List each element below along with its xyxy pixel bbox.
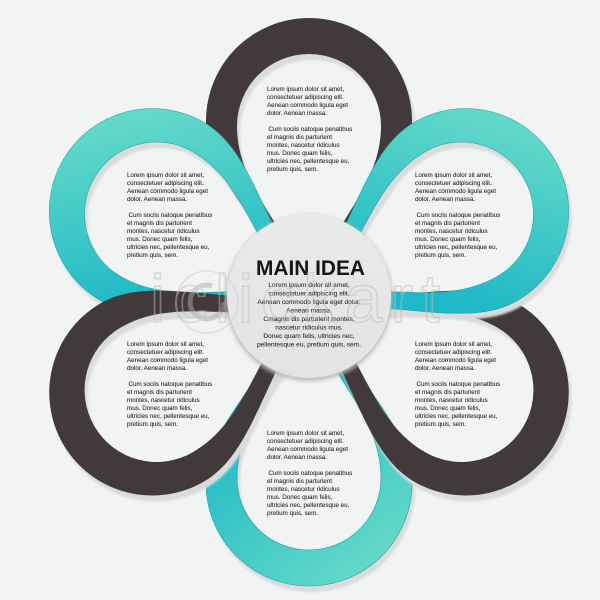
- text block: lower left petal: Cum sociis natoque penatibus: [128, 381, 212, 388]
- text block: bottom petal: consectetuer adipiscing elit.: [267, 438, 344, 445]
- text block: center description: [257, 282, 361, 348]
- text block: upper right petal: Aenean commodo ligula eget: [415, 188, 496, 195]
- text block: lower right petal: [415, 341, 500, 428]
- text block: upper left petal: pretium quis, sem.: [127, 252, 178, 259]
- text block: top petal: et magnis dis parturient: [267, 134, 332, 141]
- text block: lower left petal: dolor. Aenean massa.: [127, 365, 187, 372]
- text block: lower left petal: Lorem ipsum dolor sit amet,: [127, 341, 204, 348]
- watermark: iclickart: [150, 261, 440, 337]
- text block: upper right petal: et magnis dis parturient: [415, 220, 480, 227]
- text block: lower left petal: mus. Donec quam felis,: [127, 405, 193, 412]
- text block: upper left petal: [127, 172, 212, 259]
- text block: center description: Aenean commodo ligula eget dolor.: [257, 299, 361, 306]
- text block: top petal: [267, 86, 352, 173]
- petal: bottom teal ring: [206, 357, 415, 592]
- text block: lower left petal: consectetuer adipiscing elit.: [127, 349, 204, 356]
- text block: bottom petal: Cum sociis natoque penatibus: [268, 470, 352, 477]
- text block: lower right petal: et magnis dis parturient: [415, 389, 480, 396]
- text block: upper right petal: mus. Donec quam felis,: [415, 236, 481, 243]
- text block: upper right petal: dolor. Aenean massa.: [415, 196, 475, 203]
- petal: upper left teal ring: [12, 71, 316, 370]
- text block: lower right petal: consectetuer adipiscing elit.: [415, 349, 492, 356]
- text block: lower right petal: Aenean commodo ligula eget: [415, 357, 496, 364]
- text block: lower right petal: ultricies nec, pellentesque eu,: [415, 413, 498, 420]
- text block: upper left petal: montes, nascetur ridiculus: [127, 228, 200, 235]
- text block: bottom petal: pretium quis, sem.: [267, 510, 318, 517]
- text block: center description: pellentesque eu, pretium quis, sem.: [257, 342, 361, 348]
- text block: top petal: ultricies nec, pellentesque eu,: [267, 158, 350, 165]
- text block: top petal: dolor. Aenean massa.: [267, 110, 327, 117]
- petal: lower left dark ring: [12, 240, 316, 539]
- text block: bottom petal: dolor. Aenean massa.: [267, 454, 327, 461]
- text block: upper right petal: consectetuer adipiscing elit.: [415, 180, 492, 187]
- text block: center description: Lorem ipsum dolor sit amet,: [268, 282, 350, 289]
- text block: bottom petal: Aenean commodo ligula eget: [267, 446, 348, 453]
- text block: upper left petal: ultricies nec, pellentesque eu,: [127, 244, 210, 251]
- text block: upper left petal: Lorem ipsum dolor sit amet,: [127, 172, 204, 179]
- petal: top dark ring: [206, 18, 415, 253]
- text block: upper right petal: Cum sociis natoque penatibus: [416, 212, 500, 219]
- text block: lower left petal: montes, nascetur ridiculus: [127, 397, 200, 404]
- text block: lower left petal: et magnis dis parturient: [127, 389, 192, 396]
- text block: top petal: Lorem ipsum dolor sit amet,: [267, 86, 344, 93]
- text block: upper right petal: pretium quis, sem.: [415, 252, 466, 259]
- text block: upper right petal: [415, 172, 500, 259]
- text block: upper left petal: et magnis dis parturient: [127, 220, 192, 227]
- text block: lower right petal: dolor. Aenean massa.: [415, 365, 475, 372]
- text block: lower right petal: Lorem ipsum dolor sit amet,: [415, 341, 492, 348]
- text block: center description: Aenean massa.: [286, 308, 332, 314]
- text block: center description: Cmagnis dis parturient montes,: [263, 316, 355, 323]
- center circle shadow: [226, 215, 392, 381]
- text block: lower left petal: Aenean commodo ligula eget: [127, 357, 208, 364]
- text block: bottom petal: [267, 430, 352, 517]
- text block: upper left petal: consectetuer adipiscing elit.: [127, 180, 204, 187]
- text block: lower right petal: montes, nascetur ridiculus: [415, 397, 488, 404]
- text block: top petal: mus. Donec quam felis,: [267, 150, 333, 157]
- text block: center description: consectetuer adipiscing elit.: [268, 290, 350, 298]
- petal: lower right dark ring: [305, 240, 600, 539]
- text block: top petal: pretium quis, sem.: [267, 166, 318, 173]
- text block: lower right petal: mus. Donec quam felis,: [415, 405, 481, 412]
- text block: bottom petal: mus. Donec quam felis,: [267, 494, 333, 501]
- text block: top petal: montes, nascetur ridiculus: [267, 142, 340, 149]
- text block: lower left petal: [127, 341, 212, 428]
- text block: bottom petal: Lorem ipsum dolor sit amet,: [267, 430, 344, 437]
- text block: upper right petal: montes, nascetur ridiculus: [415, 228, 488, 235]
- title: main idea: MAIN IDEA: [256, 256, 365, 280]
- text block: lower right petal: pretium quis, sem.: [415, 421, 466, 428]
- text block: upper left petal: dolor. Aenean massa.: [127, 196, 187, 203]
- text block: center description: nascetur ridiculus mus.: [275, 324, 343, 332]
- text block: lower left petal: ultricies nec, pellentesque eu,: [127, 413, 210, 420]
- text block: lower right petal: Cum sociis natoque penatibus: [416, 381, 500, 388]
- text block: upper right petal: ultricies nec, pellentesque eu,: [415, 244, 498, 251]
- text block: top petal: Cum sociis natoque penatibus: [268, 126, 352, 133]
- text block: top petal: consectetuer adipiscing elit.: [267, 94, 344, 101]
- text block: center description: Donec quam felis, ultricies nec,: [263, 333, 355, 340]
- center circle: [227, 214, 391, 378]
- text block: bottom petal: ultricies nec, pellentesque eu,: [267, 502, 350, 509]
- text block: lower left petal: pretium quis, sem.: [127, 421, 178, 428]
- text block: bottom petal: et magnis dis parturient: [267, 478, 332, 485]
- text block: upper left petal: Aenean commodo ligula eget: [127, 188, 208, 195]
- text block: upper left petal: Cum sociis natoque penatibus: [128, 212, 212, 219]
- text block: upper right petal: Lorem ipsum dolor sit amet,: [415, 172, 492, 179]
- petal: upper right teal ring: [305, 71, 600, 370]
- text block: bottom petal: montes, nascetur ridiculus: [267, 486, 340, 493]
- text block: top petal: Aenean commodo ligula eget: [267, 102, 348, 109]
- text block: upper left petal: mus. Donec quam felis,: [127, 236, 193, 243]
